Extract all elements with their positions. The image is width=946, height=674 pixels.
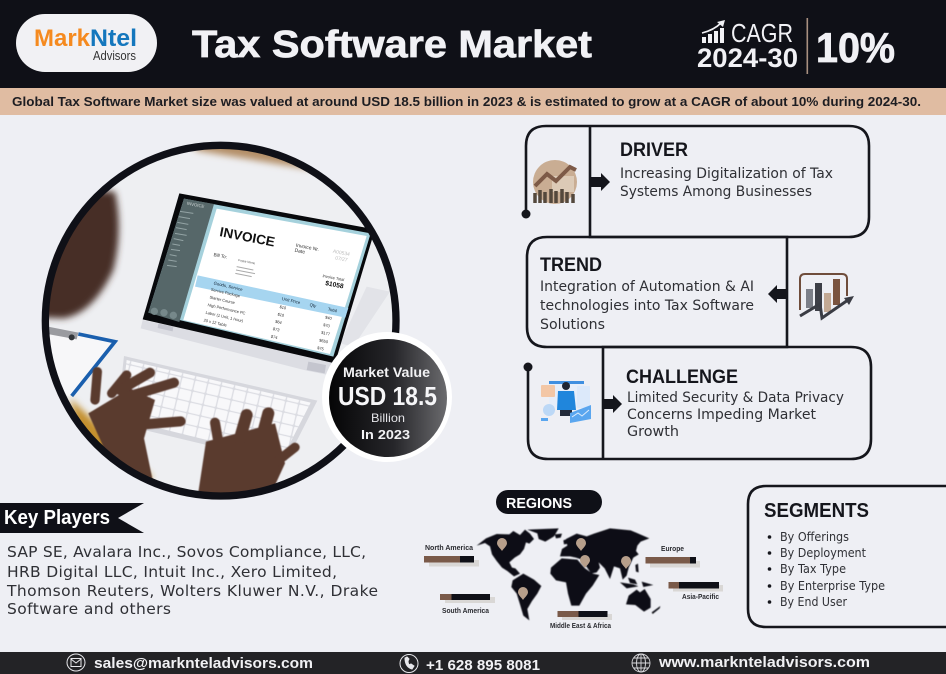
panel: key players: HRB Digital LLC, Intuit Inc., Xero Limited, <box>7 563 337 581</box>
photo circle: invoice on laptop <box>42 142 400 500</box>
panel: driver: DRIVER <box>620 139 688 161</box>
CAGR block: 10% <box>816 24 895 71</box>
segment list <box>768 530 885 609</box>
panel: key players: Software and others <box>7 600 171 618</box>
panel: segments: SEGMENTS <box>764 500 869 522</box>
photo circle: invoice on laptop: 07/27 <box>335 255 348 264</box>
region: South America <box>440 594 495 615</box>
summary band: Global Tax Software Market size was valued at around USD 18.5 billion in 2023 & is estimated to grow at a CAGR of about 10% during 2024-30. <box>12 94 921 109</box>
photo circle: invoice on laptop: $74 <box>270 334 279 340</box>
panel: challenge: Growth <box>627 424 679 440</box>
region: Europe <box>646 544 700 568</box>
photo circle: invoice on laptop: Service Package <box>210 287 241 299</box>
arrow <box>590 173 610 191</box>
photo circle: invoice on laptop: INVOICE <box>186 201 205 209</box>
region: South America: South America <box>442 606 490 615</box>
photo circle: invoice on laptop: Labor (1 Unit, 1 Hour) <box>205 310 244 323</box>
photo circle: invoice on laptop: Invoice Nr. <box>295 243 320 253</box>
photo circle: invoice on laptop: $650 <box>319 337 329 344</box>
panel: challenge: Limited Security & Data Privacy <box>627 390 844 406</box>
panel: trend: technologies into Tax Software <box>540 298 754 314</box>
panel: driver <box>522 126 869 237</box>
photo circle: invoice on laptop: $75 <box>317 345 325 352</box>
panel: key players: SAP SE, Avalara Inc., Sovos Compliance, LLC, <box>7 543 366 561</box>
footer bar: sales@marknteladvisors.com <box>94 655 313 672</box>
region: Asia-Pacific <box>668 582 723 601</box>
region: Asia-Pacific: Asia-Pacific <box>682 592 719 601</box>
panel: regions <box>424 490 723 630</box>
panel: challenge: Concerns Impeding Market <box>627 407 816 423</box>
keyboard <box>117 356 317 461</box>
segment list: By Tax Type <box>780 562 846 576</box>
photo circle: invoice on laptop: Payee Name <box>238 258 256 265</box>
photo circle: invoice on laptop: $40 <box>325 314 333 321</box>
region: Europe: Europe <box>661 544 684 553</box>
logo: Advisors <box>93 49 136 63</box>
tablet stand <box>340 287 390 347</box>
region: North America <box>424 543 479 566</box>
panel: key players <box>0 503 378 618</box>
photo circle: invoice on laptop: $70 <box>323 322 331 329</box>
market value badge: Market Value <box>343 365 431 380</box>
photo circle: invoice on laptop: Invoice Total <box>322 273 345 282</box>
arrow <box>768 285 787 303</box>
panel: trend: TREND <box>540 254 602 276</box>
photo circle: invoice on laptop: $10 <box>279 304 287 311</box>
sidebar menu lines <box>167 211 193 267</box>
photo circle: invoice on laptop: Qty <box>309 302 318 309</box>
photo circle: invoice on laptop: 20 x 12 Table <box>203 317 228 328</box>
title: Tax Software Market <box>192 24 592 66</box>
icon: bar chart with arrow <box>800 274 854 318</box>
panel: challenge: CHALLENGE <box>626 366 738 388</box>
footer bar: www.marknteladvisors.com <box>658 654 870 671</box>
ribbon heading <box>0 503 144 533</box>
footer bar: +1 628 895 8081 <box>426 657 540 674</box>
regions heading <box>496 490 602 514</box>
segment list: By Deployment <box>780 546 866 560</box>
wooden edge <box>192 149 308 174</box>
segment list: By End User <box>780 595 847 609</box>
panel: trend <box>527 237 854 347</box>
segment list: By Enterprise Type <box>780 579 885 593</box>
clipboard <box>50 334 111 396</box>
region: Middle East and Africa: Middle East & Africa <box>550 621 612 630</box>
icon: globe <box>632 654 650 672</box>
photo circle: invoice on laptop: $10 <box>277 311 285 318</box>
photo circle: invoice on laptop: $1058 <box>325 280 344 291</box>
header bar <box>0 0 946 88</box>
panel: trend: Integration of Automation & AI <box>540 279 754 295</box>
ribbon heading: Key Players <box>4 507 110 529</box>
segment list: By Offerings <box>780 530 849 544</box>
summary band <box>0 88 946 115</box>
photo circle: invoice on laptop: Total <box>327 306 338 313</box>
panel: driver: Systems Among Businesses <box>620 184 812 200</box>
world map <box>477 528 660 620</box>
icon: phone <box>400 654 418 672</box>
logo: Mark <box>34 25 91 52</box>
market value badge: In 2023 <box>361 427 410 442</box>
blurred head <box>49 186 124 324</box>
laptop screen <box>143 193 375 363</box>
panel: key players: Thomson Reuters, Wolters Kluwer N.V., Drake <box>6 582 378 600</box>
laptop base <box>141 320 335 375</box>
region: North America: North America <box>425 543 474 552</box>
logo <box>16 14 157 72</box>
photo circle: invoice on laptop: $73 <box>272 326 281 333</box>
photo circle: invoice on laptop: $64 <box>275 319 283 325</box>
logo: Ntel <box>90 25 137 52</box>
market value badge: Billion <box>371 411 405 425</box>
regions heading: REGIONS <box>506 495 572 512</box>
panel: driver: Increasing Digitalization of Tax <box>620 166 833 182</box>
panel: challenge <box>524 347 871 459</box>
photo circle: invoice on laptop: Date <box>294 248 306 256</box>
photo circle: invoice on laptop: $177 <box>321 330 331 337</box>
icon: growth chart <box>702 20 725 43</box>
CAGR block: 2024-30 <box>697 43 798 73</box>
market value badge: USD 18.5 <box>338 381 437 411</box>
icon: data security person <box>541 381 591 423</box>
arrow <box>603 395 622 413</box>
orange folder <box>68 396 156 480</box>
footer bar <box>0 652 946 674</box>
photo circle: invoice on laptop: Bill To: <box>213 252 227 260</box>
panel: segments <box>748 486 946 627</box>
CAGR block <box>697 18 895 74</box>
photo circle: invoice on laptop: A00534 <box>332 249 351 258</box>
photo circle: invoice on laptop: High Performance PC <box>207 302 246 316</box>
hands <box>88 372 295 503</box>
photo circle: invoice on laptop: INVOICE <box>218 224 276 250</box>
icon: market growth crowd <box>533 160 577 204</box>
photo circle: invoice on laptop: Starter Course <box>209 294 236 305</box>
icon: email <box>67 654 85 671</box>
map pins <box>497 538 631 600</box>
photo circle: invoice on laptop: Unit Price <box>281 296 301 305</box>
panel: trend: Solutions <box>540 317 605 333</box>
region: Middle East and Africa <box>550 611 612 630</box>
market value badge <box>322 332 452 462</box>
photo circle: invoice on laptop: Goods, Service <box>213 280 244 292</box>
ring <box>45 145 396 496</box>
CAGR block: CAGR <box>731 18 793 48</box>
